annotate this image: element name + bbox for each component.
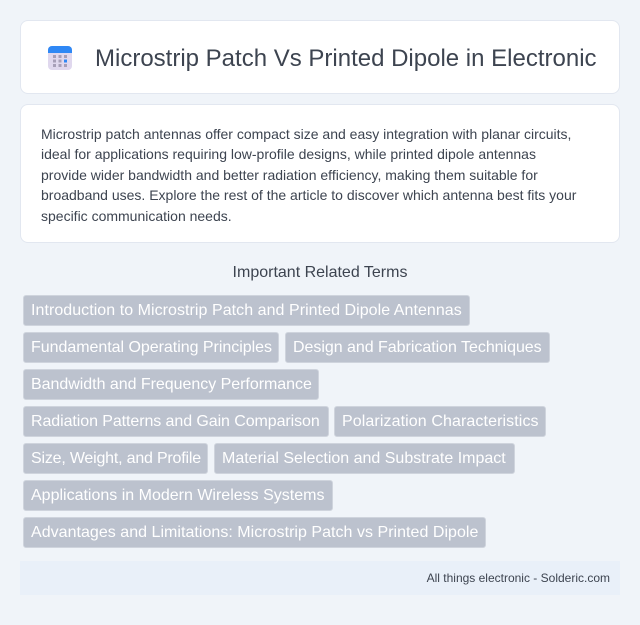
intro paragraph: ideal for applications requiring low-profile designs, while printed dipole antennas xyxy=(41,146,536,162)
tag xyxy=(23,406,329,437)
header card xyxy=(20,20,620,94)
tag xyxy=(23,443,208,474)
intro paragraph: broadband uses. Explore the rest of the article to discover which antenna best fits your xyxy=(41,187,576,203)
tag xyxy=(23,517,486,548)
footer bar xyxy=(20,561,620,595)
tag: Advantages and Limitations: Microstrip Patch vs Printed Dipole xyxy=(31,524,478,541)
tag xyxy=(285,332,550,363)
tag: Material Selection and Substrate Impact xyxy=(222,450,506,467)
intro paragraph xyxy=(41,126,576,224)
tag xyxy=(214,443,515,474)
tag xyxy=(23,295,470,326)
tag: Size, Weight, and Profile xyxy=(31,450,201,467)
tag: Introduction to Microstrip Patch and Printed Dipole Antennas xyxy=(31,302,462,319)
intro paragraph: specific communication needs. xyxy=(41,208,232,224)
intro paragraph: provide wider bandwidth and better radiation efficiency, making them suitable for xyxy=(41,167,538,183)
tag: Polarization Characteristics xyxy=(342,413,539,430)
tag: Fundamental Operating Principles xyxy=(31,339,272,356)
tag: Radiation Patterns and Gain Comparison xyxy=(31,413,320,430)
intro text panel xyxy=(20,104,620,243)
intro paragraph: Microstrip patch antennas offer compact size and easy integration with planar circuits, xyxy=(41,126,571,142)
icon: calendar xyxy=(48,46,72,70)
tag: Bandwidth and Frequency Performance xyxy=(31,376,312,393)
tag: Design and Fabrication Techniques xyxy=(293,339,542,356)
tag xyxy=(334,406,546,437)
heading: related terms: Important Related Terms xyxy=(233,264,407,281)
title: Microstrip Patch Vs Printed Dipole in Electronic xyxy=(95,45,597,72)
tag xyxy=(23,480,333,511)
footer credit: All things electronic - Solderic.com xyxy=(427,571,610,585)
tag: Applications in Modern Wireless Systems xyxy=(31,487,324,504)
tag xyxy=(23,332,279,363)
tag xyxy=(23,369,319,400)
tag list xyxy=(23,295,550,548)
